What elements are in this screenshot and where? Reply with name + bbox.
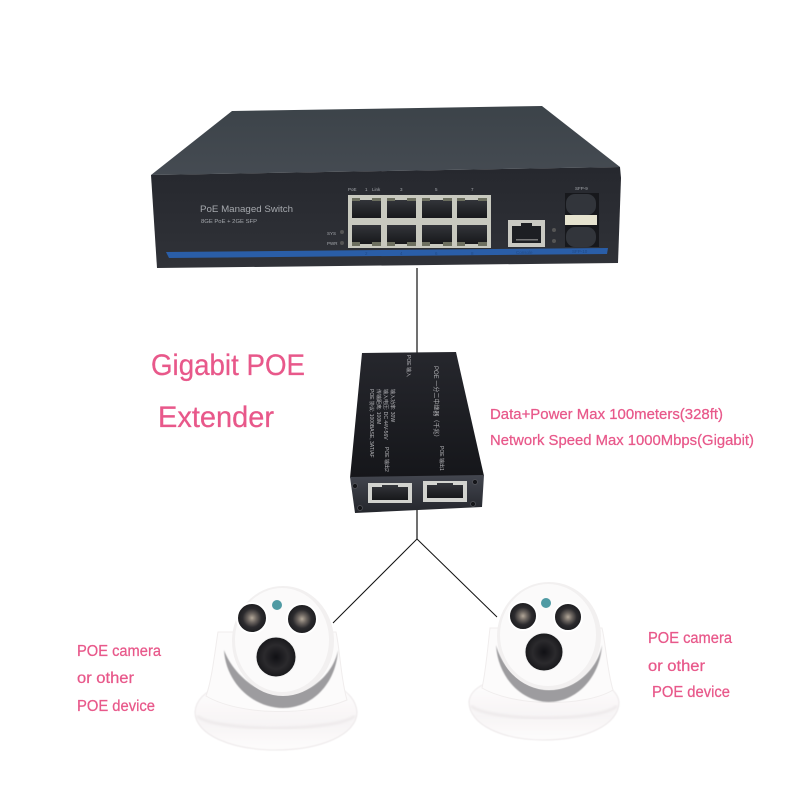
camera left [195,586,357,750]
device printed labels [368,355,445,472]
device printed labels: POE 输出1 [438,446,445,471]
title: Gigabit POE Extender: Gigabit POE [151,349,305,382]
shadow ring [496,645,602,702]
spec text [490,406,754,449]
PoE managed switch: 8 [471,251,474,256]
SFP ports [565,193,599,247]
switch label: 3 [400,187,403,192]
device printed labels: POE 协议: 1000BASE, 3AT/AF [368,389,375,458]
shadow ring [224,650,338,708]
PoE managed switch: SFP-10 [572,249,588,254]
left device caption: POE device [77,698,155,715]
screws [352,480,478,510]
PoE managed switch: 2 [365,251,368,256]
switch label: 7 [471,187,474,192]
title: Gigabit POE Extender [151,349,305,434]
switch label: PWR [327,241,338,246]
RJ45 port left [368,483,412,503]
RJ45 port right [423,481,467,502]
switch label: Link [372,187,381,192]
device printed labels: 输入电压: DC 44V-56V [382,389,389,440]
left device caption [77,643,161,715]
left device caption: or other [77,670,134,687]
right device caption [648,630,732,701]
left device caption: POE camera [77,643,161,660]
switch label: PoE [348,187,357,192]
PoE managed switch: 6 [435,251,438,256]
device printed labels: POE 输入 [405,355,412,377]
mount base [469,680,619,740]
device printed labels: POE 输出2 [383,447,390,472]
blue strip [166,248,608,258]
connector lines [333,268,497,623]
spec text: Data+Power Max 100meters(328ft) [490,406,723,423]
switch label: 5 [435,187,438,192]
PoE managed switch: 4 [400,251,403,256]
switch label: SYS [327,231,336,236]
switch label: SFP-9 [575,186,588,191]
console port [508,220,556,247]
switch label: PoE Managed Switch [200,204,293,215]
PoE managed switch [151,106,621,268]
right device caption: POE device [652,684,730,701]
switch label: 1 [365,187,368,192]
dome [232,586,334,696]
camera right [469,582,619,740]
switch label [200,186,588,246]
device printed labels: 输入功率: 30W [389,389,396,422]
switch label: 8GE PoE + 2GE SFP [201,219,257,225]
PoE managed switch: Console [516,250,533,255]
title: Gigabit POE Extender: Extender [158,401,274,434]
POE extender device [350,352,484,513]
shoulder [206,632,347,712]
device printed labels: POE 一分二中继器（千兆） [432,366,440,440]
right device caption: POE camera [648,630,732,647]
shoulder [482,628,613,703]
device printed labels: 传输距离: 100M [375,389,382,424]
8 RJ45 port block [348,195,491,248]
dome [497,582,601,690]
mount base [195,685,357,750]
right device caption: or other [648,658,705,675]
spec text: Network Speed Max 1000Mbps(Gigabit) [490,432,754,449]
